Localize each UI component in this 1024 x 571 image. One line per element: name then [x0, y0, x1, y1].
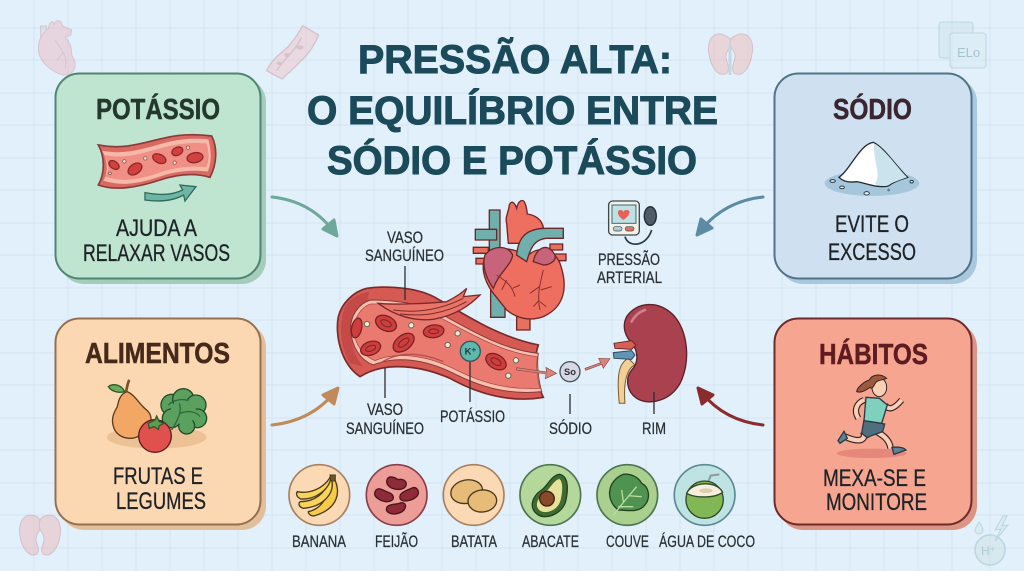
diagram: heart: [473, 201, 566, 330]
arrow: sodium to kidney: [585, 358, 610, 370]
text: ajuda a relaxar vasos: AJUDA A: [116, 215, 197, 242]
diagram: central blood vessel: [337, 287, 543, 399]
icon: pear, tomato and cabbage: [107, 380, 207, 452]
food: banana: [289, 465, 350, 551]
label: pressão arterial: [597, 249, 662, 287]
label: vaso sanguíneo bottom: VASO: [367, 401, 403, 419]
label: feijão: FEIJÃO: [375, 531, 418, 551]
text: frutas e legumes: [113, 463, 206, 515]
icon: faint kidneys top: [708, 34, 753, 75]
label: batata: BATATA: [451, 533, 497, 551]
icon: faint document top right: ELo: [957, 45, 980, 60]
arrow: potássio to centre: [272, 197, 337, 236]
text: ajuda a relaxar vasos: [83, 215, 230, 267]
icon: salt pile: [825, 142, 919, 196]
label: água de coco: ÁGUA DE COCO: [659, 532, 755, 551]
title: PRESSÃO ALTA:: [358, 36, 672, 82]
heading: sódio: SÓDIO: [833, 92, 912, 126]
icon: faint blood vessel top: [267, 26, 319, 79]
label: sódio: SÓDIO: [549, 419, 592, 438]
label: pressão arterial: PRESSÃO: [598, 249, 660, 269]
label: vaso sanguíneo top: [365, 229, 444, 265]
food: água de coco: [659, 465, 755, 551]
food: feijão: [366, 465, 427, 551]
arrow: sódio to centre: [697, 197, 763, 235]
text: frutas e legumes: LEGUMES: [116, 488, 206, 515]
label: rim: RIM: [642, 420, 666, 438]
icon: blood pressure monitor: [609, 201, 656, 244]
title: SÓDIO E POTÁSSIO: [327, 137, 697, 183]
label: abacate: ABACATE: [522, 533, 579, 551]
icon: faint document top right: [939, 22, 986, 68]
leader lines: [385, 266, 654, 414]
text: frutas e legumes: FRUTAS E: [113, 463, 203, 490]
label: potássio: POTÁSSIO: [440, 407, 505, 426]
icon: faint heart top left: [38, 21, 75, 75]
arrow: alimentos to centre: [272, 388, 338, 425]
title: [307, 36, 718, 183]
icon: sodium ion: [560, 362, 580, 382]
diagram: kidney: [613, 305, 687, 403]
text: mexa-se e monitore: [823, 465, 927, 516]
label: banana: BANANA: [292, 533, 346, 551]
icon: faint hydrogen ion bottom right: [975, 516, 1008, 565]
icon: faint hydrogen ion bottom right: H⁺: [981, 544, 996, 558]
arrow: hábitos to centre: [698, 388, 763, 425]
icon: potassium ion: K⁺: [465, 347, 476, 357]
text: evite o excesso: [828, 211, 916, 266]
text: mexa-se e monitore: MEXA-SE E: [823, 465, 926, 492]
icon: blood vessel with arrow: [98, 135, 216, 201]
label: couve: COUVE: [606, 533, 649, 551]
label: vaso sanguíneo bottom: [346, 401, 424, 438]
panel: hábitos: [774, 318, 977, 530]
text: evite o excesso: EVITE O: [835, 211, 909, 238]
food: abacate: [520, 465, 581, 551]
text: mexa-se e monitore: MONITORE: [826, 489, 927, 516]
panel: alimentos: [56, 318, 266, 530]
panel: potássio: [56, 74, 266, 284]
label: pressão arterial: ARTERIAL: [597, 269, 662, 287]
icon: runner: [837, 375, 907, 458]
food: couve: [597, 465, 658, 551]
icon: faint kidneys bottom left: [20, 515, 60, 555]
food: batata: [443, 465, 504, 551]
heading: alimentos: ALIMENTOS: [85, 338, 230, 370]
label: vaso sanguíneo top: SANGUÍNEO: [365, 246, 444, 265]
label: vaso sanguíneo bottom: SANGUÍNEO: [346, 419, 424, 438]
text: ajuda a relaxar vasos: RELAXAR VASOS: [83, 240, 230, 267]
label: vaso sanguíneo top: VASO: [387, 229, 423, 247]
title: O EQUILÍBRIO ENTRE: [307, 88, 718, 133]
heading: hábitos: HÁBITOS: [819, 337, 928, 371]
panel: sódio: [774, 74, 977, 284]
icon: potassium ion: [460, 341, 480, 361]
icon: sodium ion: So: [564, 367, 576, 377]
text: evite o excesso: EXCESSO: [828, 239, 916, 266]
heading: potássio: POTÁSSIO: [96, 92, 220, 126]
arrow: vessel to sodium: [517, 367, 557, 379]
